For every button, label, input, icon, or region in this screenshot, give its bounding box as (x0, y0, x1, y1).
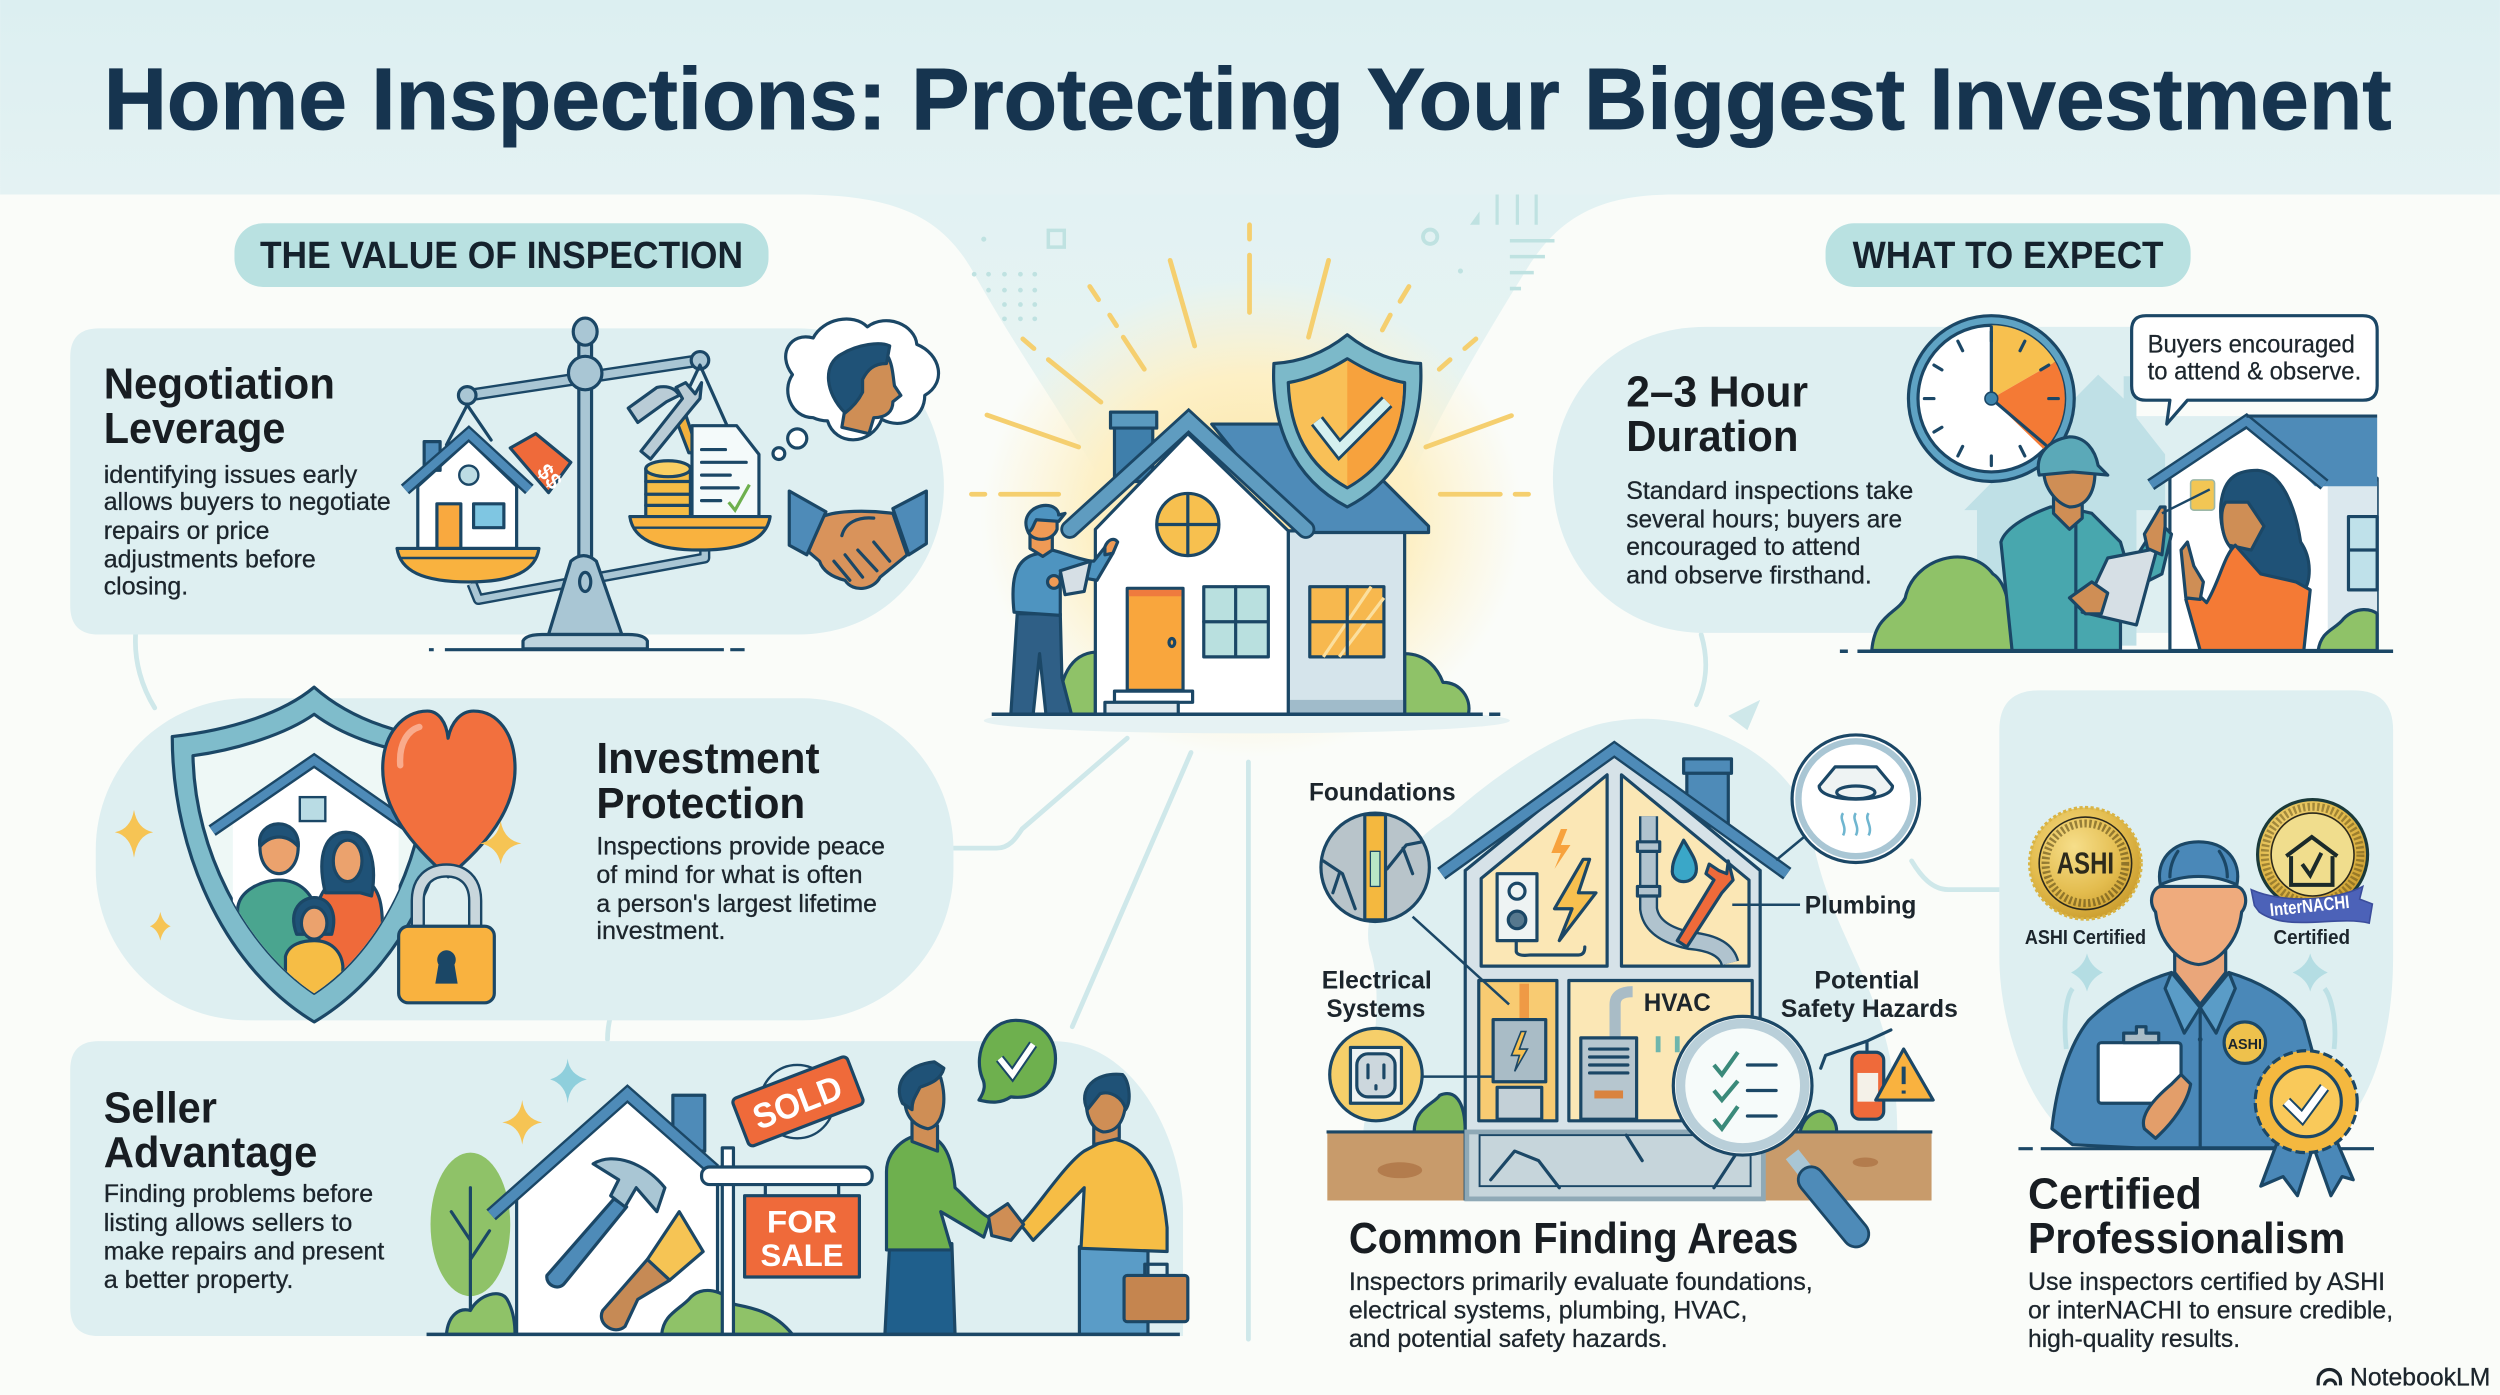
icon: sold sign (732, 1056, 864, 1147)
text: seller body: Finding problems before (104, 1181, 373, 1208)
text: negotiation body: repairs or price (104, 518, 270, 545)
label: electrical systems: Systems (1327, 996, 1425, 1023)
text: certified body (2028, 1269, 2393, 1353)
gable roof (1070, 421, 1306, 529)
icon: magnifying glass with checklist (1673, 1016, 1856, 1234)
inspector figure (1011, 505, 1118, 714)
icon: certified inspector: ASHI (2228, 1037, 2262, 1053)
electrical panel (1519, 984, 1529, 1022)
sparkles (115, 810, 521, 941)
heading pill: what to expect (1826, 223, 2191, 287)
shield with check (1274, 335, 1421, 507)
heading: seller advantage: Advantage (104, 1128, 317, 1177)
left bush (446, 1294, 515, 1334)
text: investment body (596, 834, 885, 945)
text: seller body: a better property. (104, 1267, 293, 1294)
icon: speech bubble (2132, 316, 2377, 424)
heading: investment protection (596, 734, 820, 828)
title: Home Inspections: Protecting Your Biggest Investment (104, 50, 2392, 148)
main gable body (1095, 434, 1288, 714)
pipes and wrench (1649, 816, 1730, 963)
text: negotiation body: closing. (104, 574, 188, 601)
icon: award rosette (2255, 1051, 2357, 1196)
text: negotiation body: identifying issues early (104, 462, 358, 489)
text: negotiation body (104, 462, 391, 601)
label: plumbing: Plumbing (1805, 893, 1916, 920)
family figures (236, 878, 384, 994)
icon: house on scale pan (405, 434, 571, 548)
panel: duration (1553, 314, 2393, 651)
text: seller body (104, 1181, 384, 1294)
icon: speech bubble: Buyers encouraged (2148, 331, 2355, 358)
paint brush (647, 1212, 703, 1280)
icon: house with tools (446, 1094, 792, 1334)
header band (0, 0, 2500, 195)
text: common finding body: Inspectors primarily evaluate foundations, (1349, 1269, 1813, 1296)
right wing and roof (1212, 424, 1429, 714)
label: certified: Certified (2274, 927, 2350, 949)
heading: investment protection: Protection (596, 779, 805, 828)
icon: bush (1872, 557, 2012, 650)
icon: pale house silhouette (1964, 375, 2165, 646)
icon: extinguisher and warning (1821, 1030, 1933, 1119)
text: investment body: investment. (596, 918, 725, 945)
icon: smoke detector lens (1792, 735, 1920, 863)
icon: thought cloud (773, 319, 939, 459)
icon: house cutaway: HVAC (1644, 990, 1711, 1017)
teal window (1204, 587, 1268, 657)
icon: house cutaway (1327, 749, 1932, 1200)
text: seller body: make repairs and present (104, 1238, 384, 1265)
icon: balance scale (397, 318, 770, 650)
text: duration body (1626, 478, 1913, 590)
icon: woman observing (2181, 470, 2310, 650)
icon: heart (383, 711, 515, 877)
label: potential safety hazards: Safety Hazards (1781, 996, 1958, 1023)
NotebookLM logo: NotebookLM (2350, 1364, 2490, 1391)
heading pill: the value of inspection (234, 223, 769, 287)
heading: investment protection: Investment (596, 734, 820, 783)
heading: certified professionalism (2028, 1169, 2345, 1263)
icon: for sale sign: SALE (761, 1237, 843, 1273)
panel: common finding areas (1309, 719, 1958, 1353)
text: investment body: Inspections provide peace (596, 834, 885, 861)
door (1105, 588, 1193, 714)
HVAC furnace (1615, 992, 1633, 1038)
icon: padlock (399, 870, 494, 1003)
icon: clock (1908, 316, 2074, 481)
sun rays around house (971, 225, 1529, 494)
icon: InterNACHI gold seal (2251, 800, 2372, 923)
round window (1157, 493, 1219, 556)
heading pill: what to expect: WHAT TO EXPECT (1853, 234, 2164, 277)
right bush (662, 1290, 792, 1334)
text: seller body: listing allows sellers to (104, 1210, 352, 1237)
heading: negotiation leverage: Negotiation (104, 360, 335, 409)
icon: ASHI gold seal: ASHI (2057, 848, 2114, 881)
sparkles (2071, 953, 2328, 992)
central house illustration (992, 335, 1500, 714)
text: duration body: encouraged to attend (1626, 534, 1861, 561)
background blob (1363, 719, 1897, 1132)
connector lines (135, 635, 1999, 1339)
heading: duration: 2–3 Hour (1626, 368, 1808, 417)
icon: two people shaking hands (885, 1062, 1188, 1334)
text: investment body: of mind for what is often (596, 862, 863, 889)
icon: tools, coins and document (628, 383, 759, 517)
text: certified body: high-quality results. (2028, 1326, 2240, 1353)
central glow (981, 279, 1523, 757)
icon: for sale sign (702, 1148, 872, 1334)
text: common finding body: and potential safety hazards. (1349, 1326, 1668, 1353)
central background shape (797, 195, 1674, 478)
background decorations (972, 195, 1555, 321)
icon: InterNACHI gold seal: InterNACHI (2269, 891, 2350, 920)
icon: house on scale pan: $$ (532, 459, 567, 495)
sparkles (502, 1100, 542, 1145)
panel: seller advantage (70, 1020, 1188, 1336)
label: ASHI certified: ASHI Certified (2025, 927, 2146, 949)
heading: seller advantage: Seller (104, 1083, 217, 1132)
heading: negotiation leverage: Leverage (104, 404, 285, 453)
icon: sold sign: SOLD (748, 1068, 848, 1138)
attic outlet and bolt (1497, 874, 1537, 941)
heading: certified professionalism: Professionalism (2028, 1214, 2345, 1263)
text: certified body: or interNACHI to ensure credible, (2028, 1297, 2393, 1324)
hammer (547, 1199, 627, 1287)
icon: tree (431, 1153, 510, 1334)
panel: negotiation leverage (70, 318, 944, 650)
heading: negotiation leverage (104, 360, 335, 453)
label: electrical systems (1322, 967, 1432, 1023)
heading: certified professionalism: Certified (2028, 1169, 2202, 1218)
label: electrical systems: Electrical (1322, 967, 1432, 994)
icon: outlet lens (1330, 1028, 1422, 1121)
icon: handshake (789, 491, 926, 588)
text: negotiation body: allows buyers to negotiate (104, 489, 391, 516)
bushes (1060, 652, 1469, 714)
icon: foundation crack lens (1321, 813, 1429, 921)
yellow window (1310, 587, 1384, 657)
icon: inspected house (2151, 416, 2377, 650)
text: negotiation body: adjustments before (104, 547, 316, 574)
text: duration body: and observe firsthand. (1626, 563, 1872, 590)
text: common finding body: electrical systems, plumbing, HVAC, (1349, 1297, 1747, 1324)
basement (1467, 1132, 1763, 1199)
text: duration body: Standard inspections take (1626, 478, 1913, 505)
floor shadow (984, 708, 1510, 733)
icon: family shield (115, 687, 521, 1022)
chimney (1110, 412, 1157, 481)
label: potential safety hazards (1781, 967, 1958, 1023)
icon: check speech bubble (979, 1020, 1055, 1102)
text: investment body: a person's largest lifetime (596, 891, 877, 918)
label: potential safety hazards: Potential (1814, 967, 1920, 994)
panel: investment protection (96, 687, 953, 1022)
panel: certified professionalism (1999, 690, 2393, 1353)
icon: speech bubble: to attend & observe. (2148, 358, 2361, 385)
heading: common finding areas: Common Finding Areas (1349, 1214, 1798, 1263)
heading: seller advantage (104, 1083, 317, 1177)
text: common finding body (1349, 1269, 1813, 1353)
icon: ASHI gold seal (2030, 808, 2141, 919)
heading pill: the value of inspection: THE VALUE OF INSPECTION (260, 234, 743, 277)
icon: for sale sign: FOR (767, 1203, 837, 1239)
soil band (1327, 1132, 1932, 1200)
heading: duration (1626, 368, 1808, 461)
icon: certified inspector (2018, 842, 2374, 1149)
label: foundations: Foundations (1309, 779, 1456, 806)
icon: inspector figure (2001, 437, 2210, 650)
heading: duration: Duration (1626, 412, 1798, 461)
text: duration body: several hours; buyers are (1626, 507, 1902, 534)
text: certified body: Use inspectors certified by ASHI (2028, 1269, 2385, 1296)
